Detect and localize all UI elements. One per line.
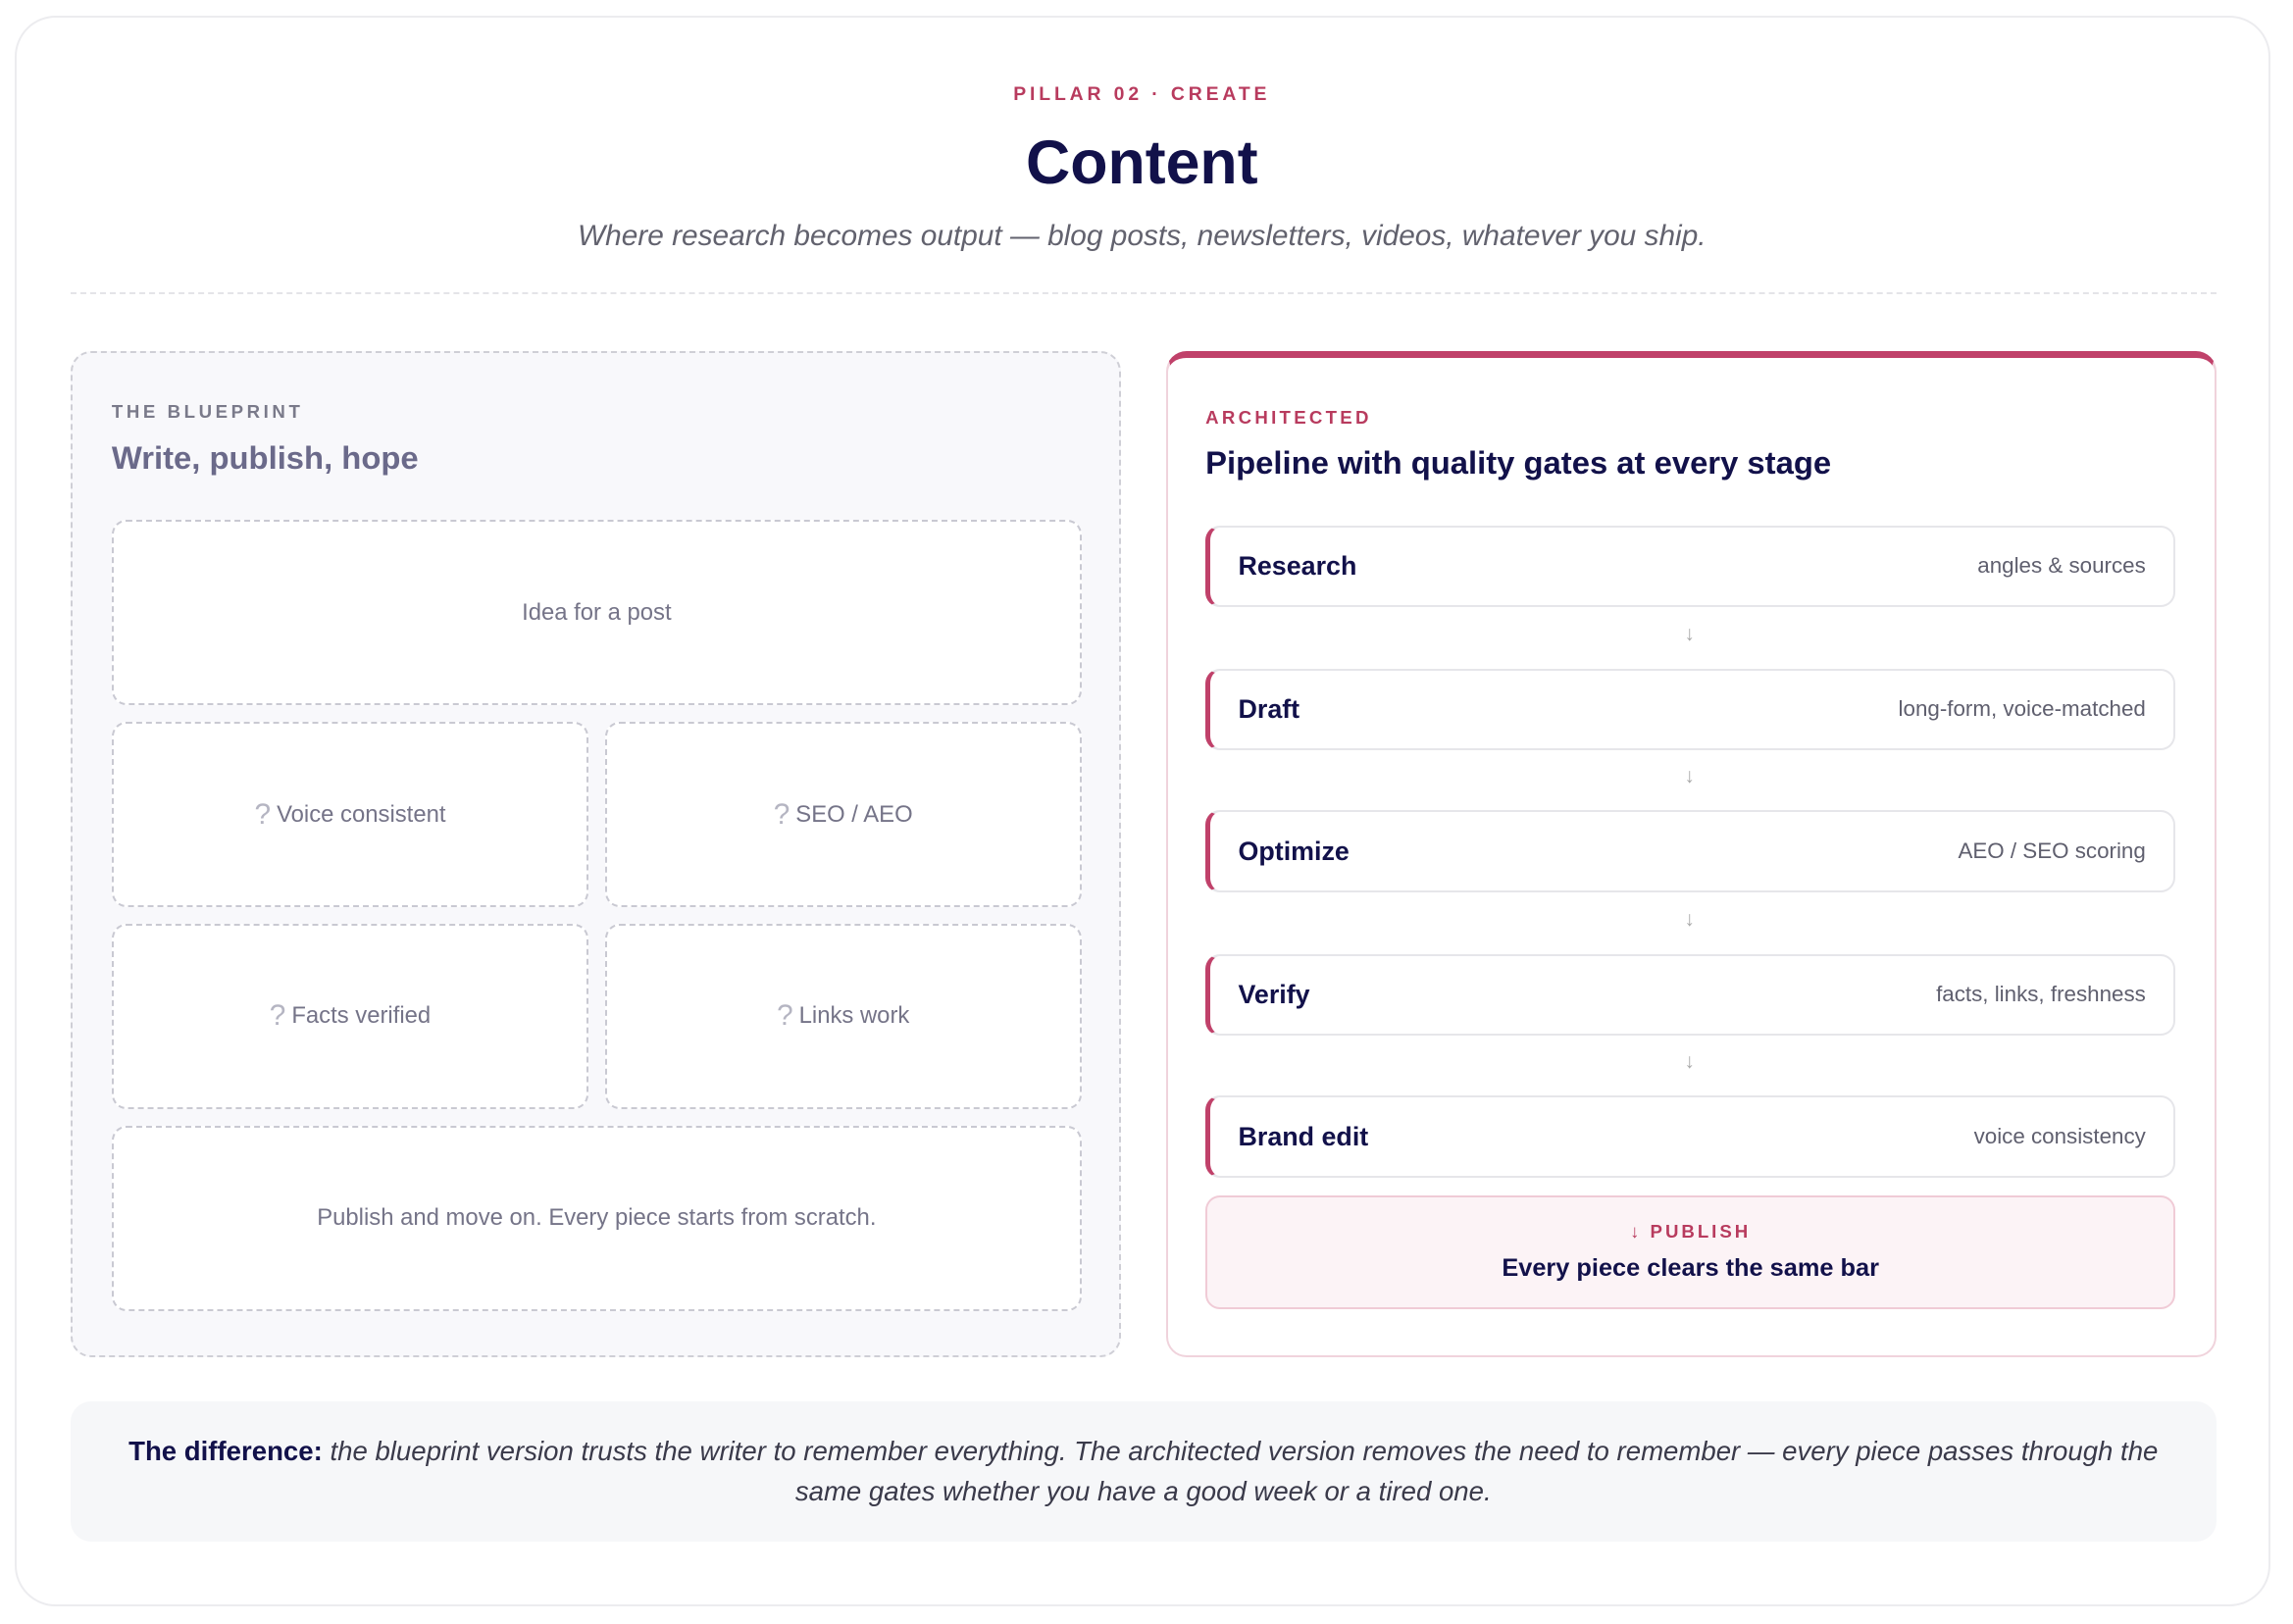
architected heading: Pipeline with quality gates at every stage [1205, 444, 1831, 481]
step: draft: long-form, voice-matched [1899, 696, 2146, 721]
difference callout [71, 1401, 2217, 1542]
step: draft [1205, 669, 2175, 750]
difference callout: same gates whether you have a good week or a tired one. [795, 1476, 1492, 1506]
arrow: ↓ [1685, 623, 1695, 645]
box: links [605, 924, 1082, 1109]
step: verify [1205, 954, 2175, 1036]
publish callout: ↓ PUBLISH [1630, 1221, 1751, 1242]
box: publish: Publish and move on. Every piece starts from scratch. [317, 1204, 876, 1231]
title: Content [1026, 128, 1258, 197]
step: verify: Verify [1238, 980, 1310, 1009]
box: links: Links work [799, 1002, 909, 1029]
box: facts: Facts verified [291, 1002, 431, 1029]
step: research: Research [1238, 551, 1356, 581]
publish callout [1205, 1195, 2175, 1309]
step: verify: facts, links, freshness [1936, 982, 2146, 1006]
arrow: ↓ [1685, 765, 1695, 787]
publish callout: Every piece clears the same bar [1502, 1253, 1879, 1281]
panel: architected [1166, 351, 2217, 1357]
panel: blueprint [71, 351, 1121, 1357]
blueprint label: THE BLUEPRINT [112, 401, 303, 422]
box: voice: Voice consistent [277, 801, 445, 828]
box: idea: Idea for a post [522, 599, 672, 626]
box: voice: ? [255, 798, 271, 831]
box: seo: ? [774, 798, 790, 831]
box: seo: SEO / AEO [795, 801, 913, 828]
step: research [1205, 526, 2175, 607]
step: brand edit: voice consistency [1974, 1124, 2146, 1148]
box: facts [112, 924, 588, 1109]
step: brand edit: Brand edit [1238, 1122, 1368, 1151]
box: seo [605, 722, 1082, 907]
architected label: ARCHITECTED [1205, 407, 1372, 428]
difference callout: The difference: the blueprint version trusts the writer to remember everything. The architected version removes the need to remember — every piece passes through the [128, 1436, 2158, 1466]
box: idea [112, 520, 1082, 705]
step: optimize: Optimize [1238, 837, 1350, 866]
subtitle: Where research becomes output — blog posts, newsletters, videos, whatever you ship. [578, 220, 1707, 252]
box: facts: ? [270, 999, 285, 1032]
step: optimize: AEO / SEO scoring [1958, 838, 2146, 863]
box: publish [112, 1126, 1082, 1311]
arrow: ↓ [1685, 1050, 1695, 1073]
blueprint heading: Write, publish, hope [112, 439, 419, 476]
step: draft: Draft [1238, 694, 1299, 724]
box: voice [112, 722, 588, 907]
arrow: ↓ [1685, 908, 1695, 931]
step: optimize [1205, 810, 2175, 892]
box: links: ? [777, 999, 793, 1032]
kicker: PILLAR 02 · CREATE [1013, 83, 1270, 105]
step: research: angles & sources [1977, 553, 2146, 578]
step: brand edit [1205, 1095, 2175, 1178]
